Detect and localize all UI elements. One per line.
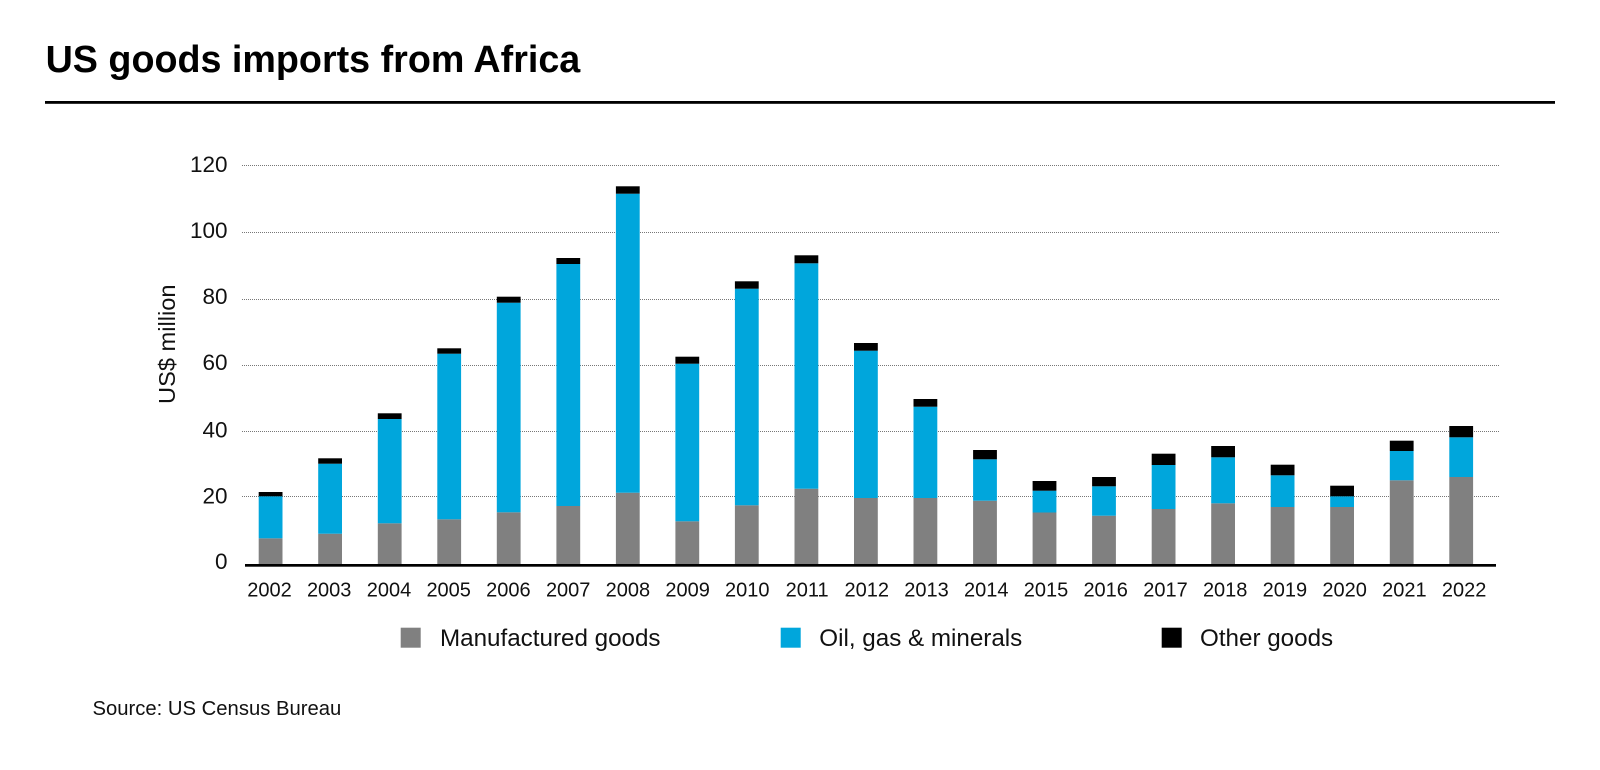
x axis labels	[247, 580, 1486, 602]
y axis title: US$ million	[154, 284, 180, 404]
y axis labels: 100	[190, 218, 228, 243]
y axis labels	[190, 152, 228, 574]
stacked bar chart	[259, 186, 1473, 565]
x axis labels: 2011	[786, 580, 829, 602]
x axis labels: 2016	[1083, 580, 1128, 602]
legend item: other goods: Other goods	[1200, 625, 1333, 652]
x axis labels: 2003	[307, 580, 351, 602]
source note: Source: US Census Bureau	[92, 698, 341, 720]
x axis labels: 2014	[964, 580, 1009, 602]
x axis labels: 2008	[606, 580, 650, 602]
x axis labels: 2006	[486, 580, 531, 602]
x axis labels: 2021	[1382, 580, 1427, 602]
series: manufactured goods	[259, 477, 1473, 565]
series: oil, gas and minerals	[259, 194, 1473, 538]
x axis labels: 2020	[1322, 580, 1367, 602]
x axis labels: 2005	[426, 580, 471, 602]
x axis labels: 2019	[1263, 580, 1307, 602]
legend item: oil, gas and minerals: Oil, gas & minerals	[819, 625, 1022, 652]
y axis labels: 60	[202, 350, 228, 375]
x axis labels: 2002	[247, 580, 292, 602]
x axis labels: 2017	[1143, 580, 1188, 602]
y axis labels: 20	[202, 483, 228, 508]
title: US goods imports from Africa	[46, 38, 581, 80]
x axis labels: 2004	[367, 580, 411, 602]
legend	[401, 625, 1333, 652]
x axis labels: 2010	[725, 580, 770, 602]
x axis labels: 2018	[1203, 580, 1247, 602]
y axis labels: 80	[202, 284, 228, 309]
x axis labels: 2012	[845, 580, 889, 602]
x axis labels: 2009	[665, 580, 710, 602]
x axis labels: 2007	[546, 580, 590, 602]
y axis labels: 0	[215, 549, 228, 574]
y axis labels: 120	[190, 152, 228, 177]
y axis labels: 40	[202, 417, 228, 442]
x axis labels: 2015	[1024, 580, 1068, 602]
x axis labels: 2022	[1442, 580, 1486, 602]
series: other goods	[259, 186, 1473, 496]
legend item: manufactured goods: Manufactured goods	[440, 625, 661, 652]
x axis labels: 2013	[904, 580, 949, 602]
